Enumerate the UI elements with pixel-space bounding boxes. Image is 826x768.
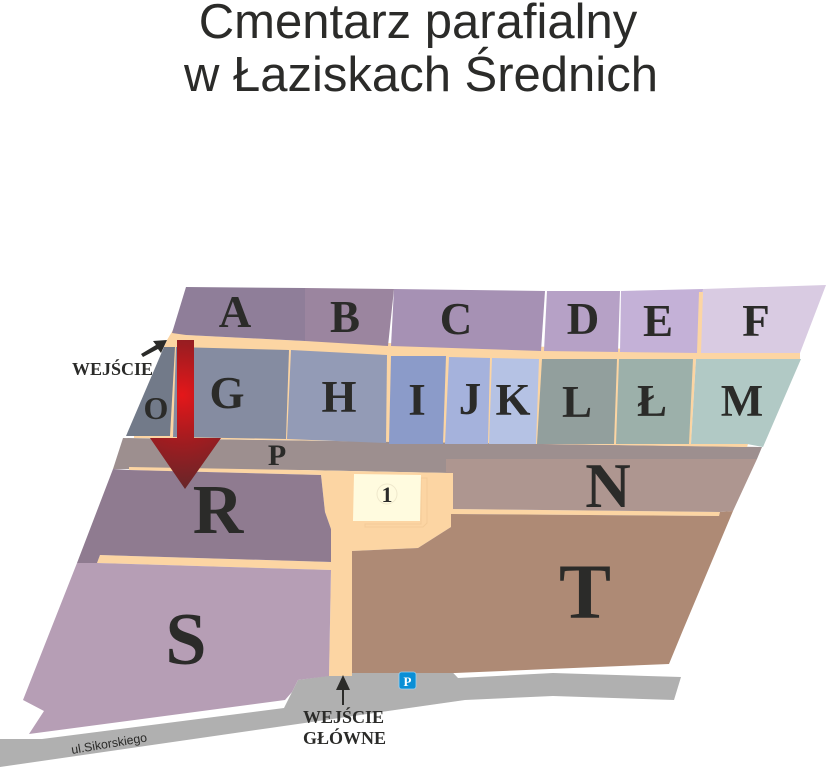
section P: gray alley <box>113 438 762 473</box>
section O <box>126 347 175 436</box>
icon: parking <box>399 672 416 689</box>
section J <box>445 357 490 444</box>
cemetery map <box>0 285 826 767</box>
section F <box>700 285 826 353</box>
section letters: D <box>567 294 599 344</box>
section G <box>173 347 289 439</box>
section R <box>77 469 331 563</box>
section letters: J <box>459 374 481 424</box>
section letters: I <box>408 375 426 425</box>
paths <box>97 330 800 676</box>
section letters: N <box>585 451 631 521</box>
section letters: G <box>209 368 245 418</box>
section letters: K <box>495 375 531 425</box>
section B <box>305 288 394 346</box>
section D <box>544 291 620 352</box>
section H <box>287 350 387 443</box>
section K <box>489 358 539 444</box>
main entrance label: WEJŚCIE <box>303 706 384 727</box>
section letters: A <box>219 287 252 337</box>
road: ul. Sikorskiego and parking <box>0 660 681 767</box>
red direction arrow <box>150 340 221 489</box>
chapel building 1 <box>353 474 427 527</box>
title <box>183 0 658 102</box>
section letters: C <box>440 294 472 344</box>
section T <box>352 511 733 673</box>
section letters: P <box>268 439 286 472</box>
section letters: Ł <box>637 376 667 426</box>
section E <box>620 289 703 353</box>
main entrance label <box>303 706 386 748</box>
section C <box>391 289 545 351</box>
section letters: E <box>643 296 673 346</box>
section letters: H <box>321 372 357 422</box>
section letters: O <box>144 390 168 426</box>
chapel building 1: 1 <box>382 482 392 507</box>
section letters: M <box>721 376 763 426</box>
section letters: R <box>193 472 245 549</box>
title: w Łaziskach Średnich <box>183 47 658 102</box>
section N <box>446 459 757 512</box>
icon: parking: P <box>404 674 412 689</box>
main entrance arrow <box>336 675 350 705</box>
main entrance label: GŁÓWNE <box>303 727 386 748</box>
section A <box>172 287 305 341</box>
section letters: B <box>330 292 360 342</box>
side entrance arrow and label <box>72 340 167 379</box>
section letters: F <box>742 296 770 346</box>
section L <box>537 359 617 444</box>
side entrance arrow and label: WEJŚCIE <box>72 358 153 379</box>
section letters: T <box>559 548 611 635</box>
section letters <box>144 287 770 681</box>
road: ul. Sikorskiego and parking: ul.Sikorskiego <box>70 730 148 757</box>
section Ł <box>616 359 693 444</box>
section I <box>389 356 446 444</box>
section S <box>23 563 331 734</box>
section M <box>691 359 801 447</box>
section letters: L <box>562 377 592 427</box>
section letters: S <box>165 599 207 681</box>
